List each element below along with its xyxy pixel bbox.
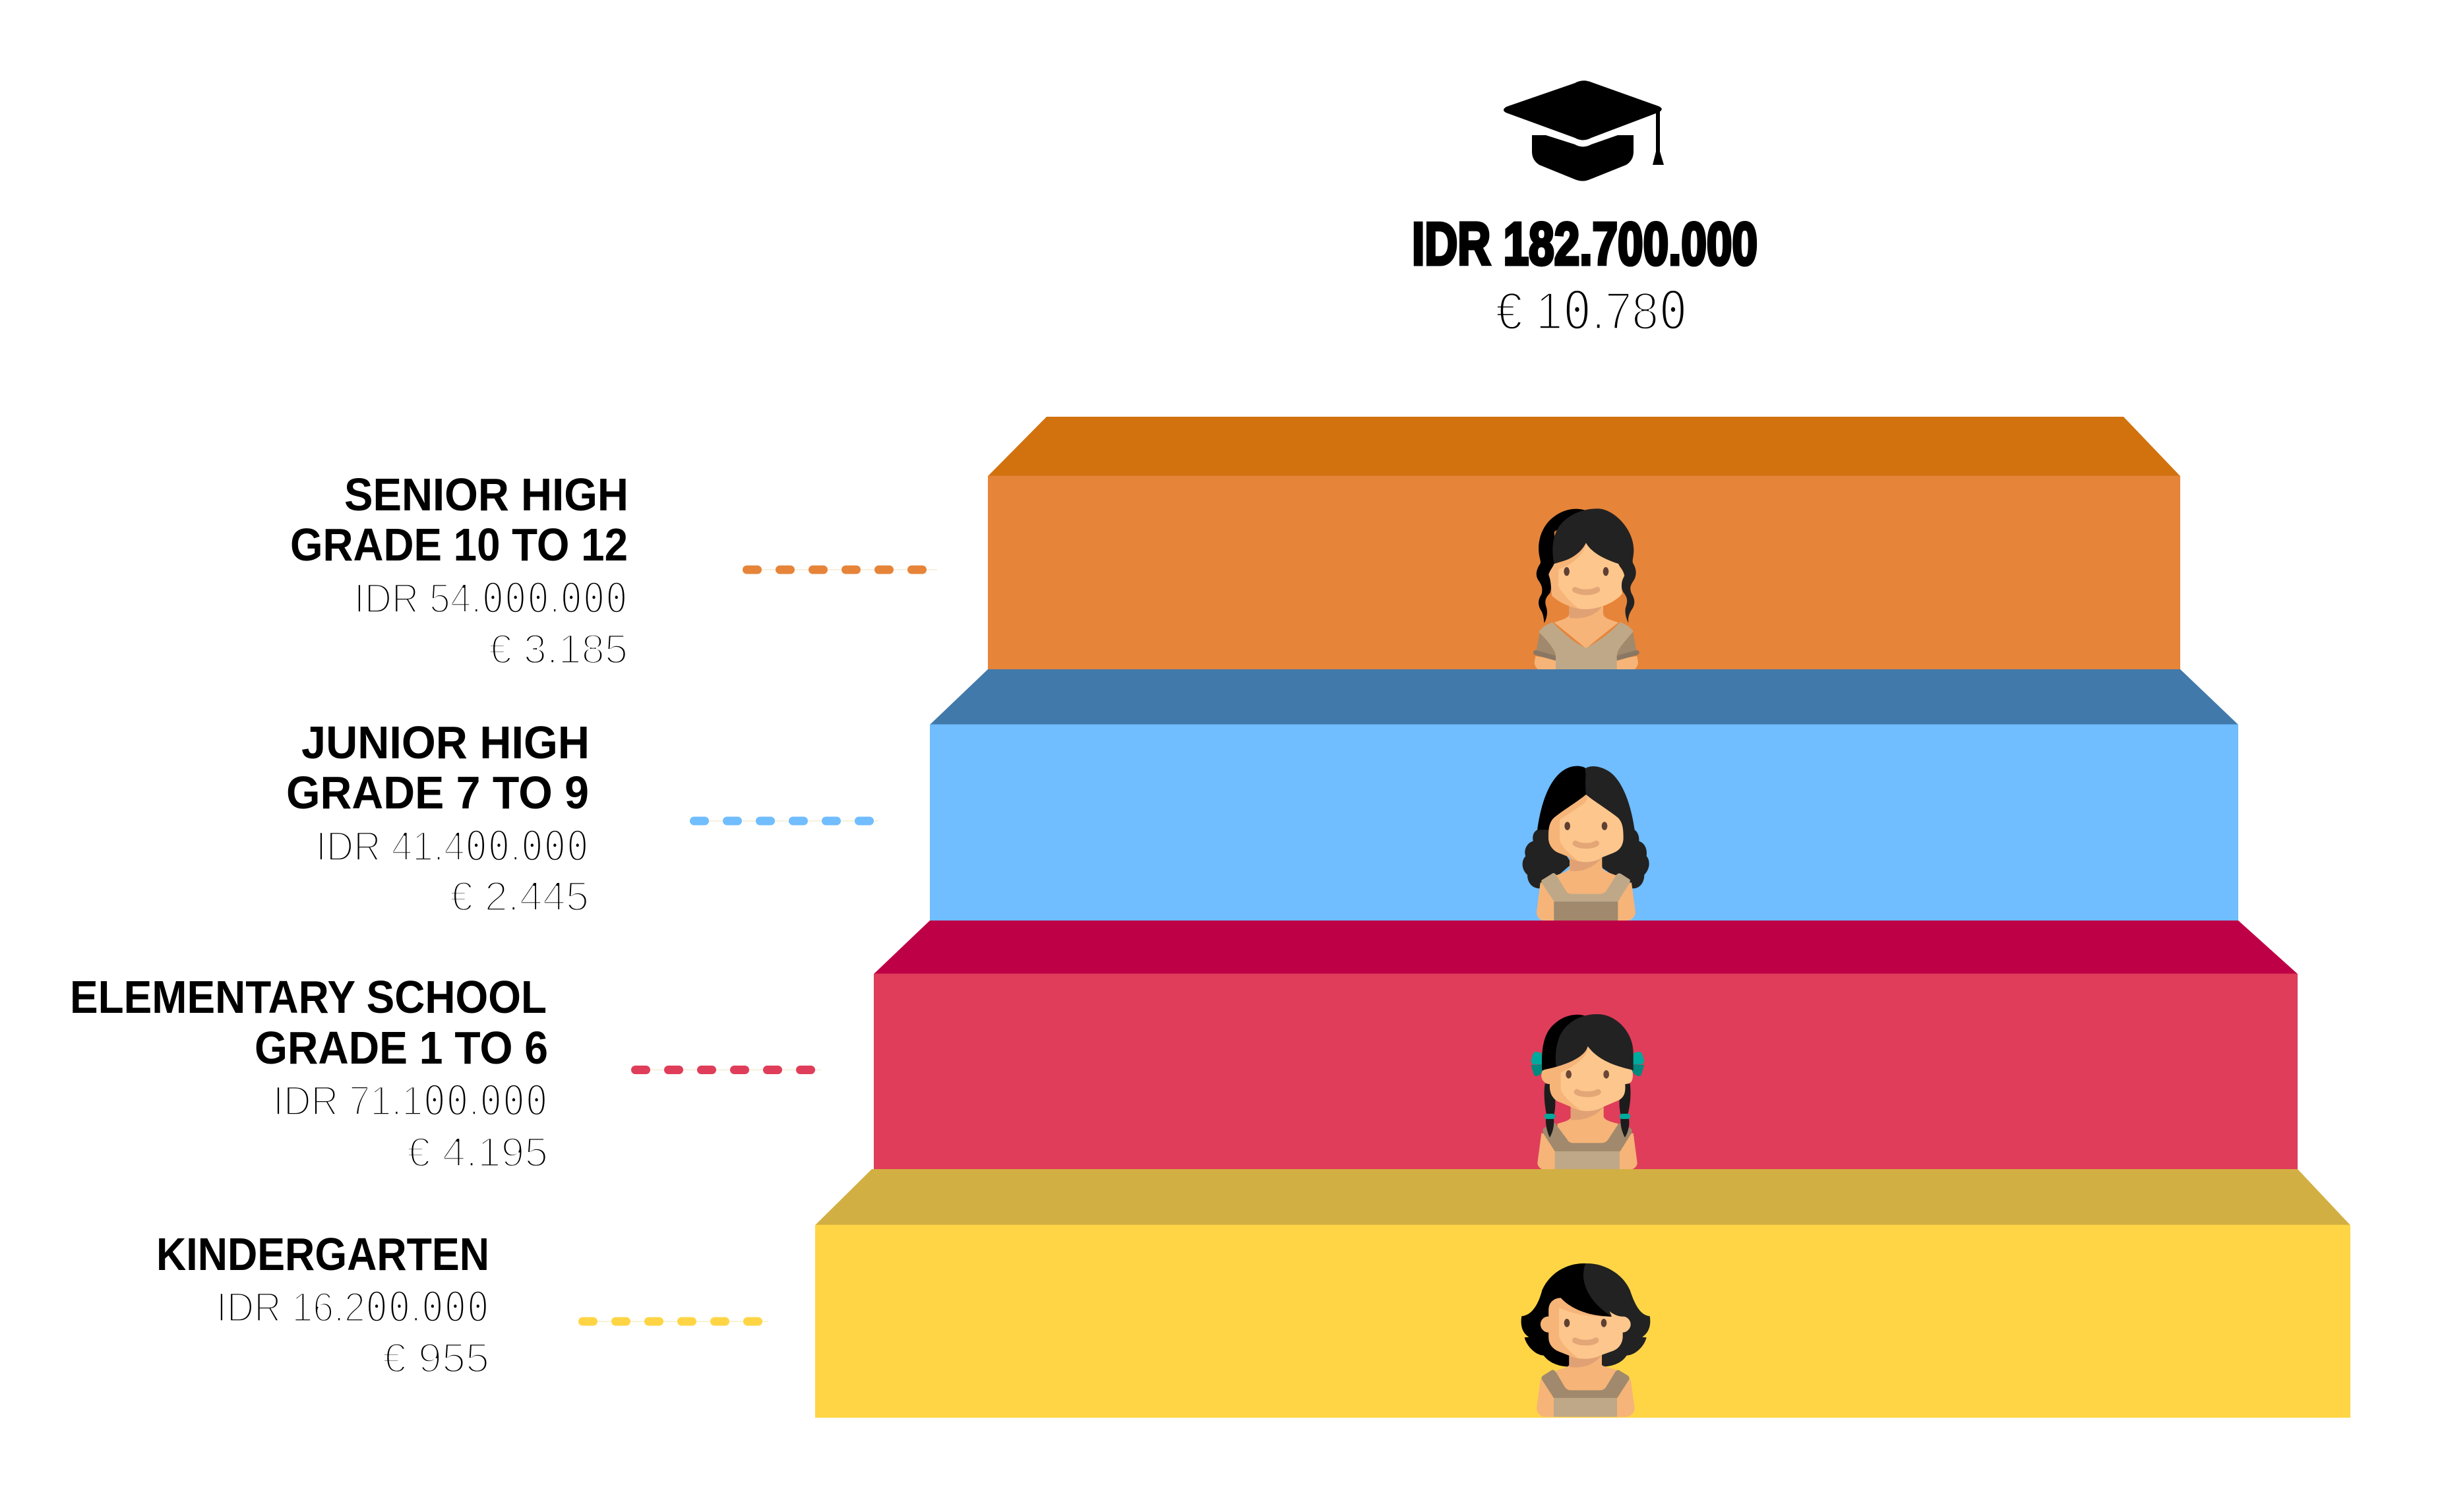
label: junior high: € 2.445	[450, 874, 589, 920]
label: kindergarten	[156, 1228, 489, 1381]
icon: graduation cap	[1504, 80, 1664, 181]
label: elementary school: € 4.195	[407, 1130, 548, 1176]
label: junior high	[286, 717, 590, 920]
total amount	[1412, 211, 1758, 342]
label: senior high: € 3.185	[489, 626, 628, 673]
dotted connector: elementary school	[631, 1066, 821, 1074]
dotted connector: kindergarten	[578, 1317, 768, 1325]
avatar: senior high girl	[1535, 508, 1638, 671]
step: elementary school	[874, 921, 2298, 1169]
label: kindergarten: IDR 16.200.000	[216, 1283, 489, 1331]
label: elementary school	[70, 971, 548, 1176]
label: elementary school: IDR 71.100.000	[273, 1077, 548, 1125]
step: junior high	[930, 669, 2238, 921]
label: elementary school: GRADE 1 TO 6	[255, 1022, 548, 1074]
step: kindergarten	[815, 1169, 2350, 1418]
label: senior high: SENIOR HIGH	[344, 469, 628, 520]
label: senior high	[290, 469, 628, 673]
label: senior high: GRADE 10 TO 12	[290, 519, 628, 570]
label: junior high: IDR 41.400.000	[316, 822, 589, 870]
label: elementary school: ELEMENTARY SCHOOL	[70, 971, 547, 1023]
dotted connector: senior high	[743, 566, 937, 574]
label: senior high: IDR 54.000.000	[354, 574, 628, 622]
avatar: kindergarten girl	[1521, 1263, 1650, 1417]
dotted connector: junior high	[690, 816, 878, 826]
total in euro: € 10.780	[1496, 280, 1688, 342]
avatar: elementary girl	[1531, 1014, 1644, 1170]
label: junior high: GRADE 7 TO 9	[286, 767, 589, 818]
label: junior high: JUNIOR HIGH	[301, 717, 590, 768]
total in rupiah: IDR 182.700.000	[1412, 211, 1758, 278]
avatar: junior high girl	[1523, 766, 1649, 921]
step: senior high	[988, 417, 2180, 670]
label: kindergarten: € 955	[382, 1335, 489, 1381]
label: kindergarten: KINDERGARTEN	[156, 1228, 489, 1280]
